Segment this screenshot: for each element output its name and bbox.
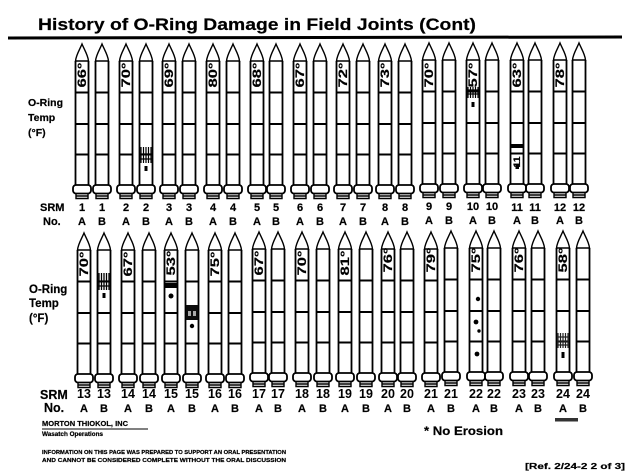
- rocket 20A: [379, 232, 397, 415]
- rocket 24B: B: [579, 403, 587, 415]
- rocket 13B with damage: [95, 233, 113, 415]
- rocket 4B: [224, 44, 242, 228]
- rocket 7B: 7: [360, 202, 366, 214]
- rocket 20A: 76°: [381, 247, 395, 272]
- rocket 7A: [334, 44, 352, 228]
- rocket 18A: A: [298, 403, 306, 415]
- rocket 18A: 18: [295, 387, 309, 401]
- rocket 21A: A: [427, 403, 435, 415]
- rocket 6B: [311, 44, 329, 228]
- rocket 11B: [526, 43, 544, 227]
- rocket 12B: 12: [573, 202, 585, 214]
- reference note: [Ref. 2/24-2 2 of 3]: [525, 462, 625, 471]
- rocket 20B: B: [403, 403, 411, 415]
- rocket 1B: B: [98, 216, 106, 228]
- rocket 13A: [75, 233, 93, 415]
- disclaimer: INFORMATION ON THIS PAGE WAS PREPARED TO SUPPORT AN ORAL PRESENTATION: [42, 450, 286, 456]
- rocket 11B: 11: [529, 202, 541, 214]
- rocket 1A: 1: [79, 202, 85, 214]
- rocket 16B: 16: [228, 387, 242, 401]
- rocket 9A: A: [425, 215, 433, 227]
- rocket 17A: 67°: [252, 250, 266, 276]
- rocket 10B: 10: [486, 201, 498, 213]
- rocket 11A with damage: 63°: [510, 62, 524, 88]
- rocket 5B: 5: [273, 202, 279, 214]
- rocket 24A with damage: [554, 231, 572, 415]
- rocket 1A: 66°: [75, 62, 89, 88]
- row 1 axis label: O-Ring temp: Temp: [28, 112, 55, 124]
- rocket 15B with damage: B: [188, 403, 196, 415]
- rocket 3B: [180, 44, 198, 228]
- rocket 18B: 18: [316, 387, 330, 401]
- rocket 5A: 5: [254, 202, 260, 214]
- rocket 3B: B: [185, 216, 193, 228]
- rocket 17A: A: [255, 403, 263, 415]
- rocket 1A: [73, 44, 91, 228]
- rocket 8A: 73°: [378, 62, 392, 88]
- rocket 14A: 14: [121, 387, 135, 401]
- row 1 axis label: O-Ring temp: (°F): [28, 127, 46, 139]
- rocket 23B: 23: [531, 387, 545, 401]
- rocket 3A: 69°: [162, 62, 176, 88]
- rocket 22B: 22: [487, 387, 501, 401]
- rocket 20A: 20: [381, 387, 395, 401]
- rocket 12A: A: [556, 215, 564, 227]
- rocket 10A with damage: [464, 43, 482, 227]
- rocket 14B: 14: [142, 387, 156, 401]
- rocket 8B: B: [401, 216, 409, 228]
- rocket 23A: A: [515, 403, 523, 415]
- rocket 23A: 23: [512, 387, 526, 401]
- rocket 3A: A: [165, 216, 173, 228]
- rocket 4B: 4: [230, 202, 237, 214]
- rocket 1B: 1: [99, 202, 105, 214]
- rocket 16A: 16: [208, 387, 222, 401]
- rocket 17A: [250, 232, 268, 415]
- rocket 15A with damage: 53°: [164, 250, 178, 276]
- rocket 19A: [336, 232, 354, 415]
- disclaimer: AND CANNOT BE CONSIDERED COMPLETE WITHOUT THE ORAL DISCUSSION: [42, 458, 286, 464]
- rocket 18A: 70°: [295, 250, 309, 276]
- rocket 22B: B: [490, 403, 498, 415]
- rocket 4B: B: [229, 216, 237, 228]
- rocket 17B: 17: [271, 387, 285, 401]
- rocket 21B: [442, 231, 460, 415]
- rocket 2A: [117, 44, 135, 228]
- rocket 7A: 72°: [336, 62, 350, 88]
- rocket 14A: A: [124, 403, 132, 415]
- rocket 11B: B: [531, 215, 539, 227]
- rocket 2B with damage: [137, 44, 155, 228]
- rocket 17A: 17: [252, 387, 266, 401]
- rocket 6B: B: [316, 216, 324, 228]
- rocket 7B: [354, 44, 372, 228]
- rocket 7A: 7: [340, 202, 346, 214]
- rocket 22A with damage: [467, 231, 485, 415]
- rocket 12A: [551, 43, 569, 227]
- rocket 5A: [248, 44, 266, 228]
- rocket 16B: [226, 233, 244, 415]
- row 1 axis label: SRM No.: No.: [43, 216, 61, 228]
- rocket 23B: B: [534, 403, 542, 415]
- rocket 20A: A: [384, 403, 392, 415]
- rocket 14A: [119, 233, 137, 415]
- rocket 2B with damage: 2: [143, 202, 149, 214]
- rocket 19A: 19: [338, 387, 352, 401]
- rocket 14B: B: [145, 403, 153, 415]
- title: History of O-Ring Damage in Field Joints (Cont): [38, 15, 476, 34]
- rocket 1B: [93, 44, 111, 228]
- rocket 16A: A: [211, 403, 219, 415]
- rocket 19B: [357, 232, 375, 415]
- row 2 axis label: SRM No.: No.: [44, 401, 64, 415]
- rocket 24A with damage: A: [559, 403, 567, 415]
- rocket 2B with damage: B: [142, 216, 150, 228]
- rocket 13B with damage: 13: [97, 387, 111, 401]
- rocket 20B: 20: [400, 387, 414, 401]
- rocket 21A: 21: [424, 387, 438, 401]
- rocket 14A: 67°: [121, 251, 135, 276]
- rocket 13A: A: [80, 403, 88, 415]
- rocket 19A: A: [341, 403, 349, 415]
- rocket 12B: B: [575, 215, 583, 227]
- rocket 6A: 6: [297, 202, 303, 214]
- rocket 11A with damage: 11: [511, 202, 523, 214]
- rocket 23A: 76°: [512, 247, 526, 272]
- row 2 axis label: O-Ring temp: (°F): [29, 313, 48, 325]
- rocket 2A: 2: [123, 202, 129, 214]
- division name: Wasatch Operations: [42, 432, 104, 438]
- row 1 axis label: SRM No.: SRM: [40, 202, 64, 214]
- rocket 18B: [314, 232, 332, 415]
- rocket 10A with damage: 10: [467, 201, 479, 213]
- rocket 11A with damage: A: [513, 215, 521, 227]
- rocket 8A: 8: [382, 202, 388, 214]
- rocket 9B: B: [445, 215, 453, 227]
- rocket 1A: A: [78, 216, 86, 228]
- rocket 16B: B: [231, 403, 239, 415]
- rocket 3A: [160, 44, 178, 228]
- row 1 axis label: O-Ring temp: O-Ring: [28, 97, 63, 109]
- rocket 21A: 79°: [424, 247, 438, 272]
- rocket 13A: 13: [77, 387, 91, 401]
- rocket 22A with damage: 75°: [469, 247, 483, 272]
- rocket 12A: 78°: [553, 62, 567, 88]
- rocket 19B: 19: [359, 387, 373, 401]
- rocket 19A: 81°: [338, 250, 352, 276]
- rocket 15B with damage: [183, 233, 201, 415]
- rocket 9B: 9: [446, 201, 452, 213]
- rocket 17B: [269, 232, 287, 415]
- company underline: [42, 428, 148, 430]
- rocket 23A: [510, 231, 528, 415]
- rocket 15A with damage: [162, 233, 180, 415]
- rocket 8B: [396, 44, 414, 228]
- rocket 3B: 3: [186, 202, 192, 214]
- rocket 16A: [206, 233, 224, 415]
- rocket 12A: 12: [554, 202, 566, 214]
- rocket 24A with damage: 58°: [556, 247, 570, 272]
- rocket 9B: [440, 43, 458, 227]
- rocket 6A: A: [296, 216, 304, 228]
- rocket 10B: B: [488, 215, 496, 227]
- legend: no erosion: * No Erosion: [424, 424, 503, 438]
- rocket 15B with damage: 15: [185, 387, 199, 401]
- rocket 2A: A: [122, 216, 130, 228]
- rocket 24B: [574, 231, 592, 415]
- rocket 4A: 80°: [206, 62, 220, 88]
- rocket 9A: 9: [426, 201, 432, 213]
- rocket 10B: [483, 43, 501, 227]
- rocket 24A with damage: 24: [556, 387, 570, 401]
- rocket 7B: B: [359, 216, 367, 228]
- row 2 axis label: O-Ring temp: O-Ring: [29, 284, 67, 296]
- rocket 4A: A: [209, 216, 217, 228]
- rocket 9A: 70°: [422, 62, 436, 88]
- rocket 11A with damage: [508, 43, 526, 227]
- rocket 7A: A: [339, 216, 347, 228]
- rocket 8B: 8: [402, 202, 408, 214]
- rocket 22A with damage: A: [472, 403, 480, 415]
- rocket 16A: 75°: [208, 251, 222, 276]
- rocket 5A: A: [253, 216, 261, 228]
- rocket 5B: [267, 44, 285, 228]
- rocket 17B: B: [274, 403, 282, 415]
- rocket 15A with damage: 15: [164, 387, 178, 401]
- rocket 18B: B: [319, 403, 327, 415]
- rocket 21A: [422, 232, 440, 415]
- rocket 4A: [204, 44, 222, 228]
- rocket 22A with damage: 22: [469, 387, 483, 401]
- company name: MORTON THIOKOL, INC: [42, 421, 128, 428]
- rocket 4A: 4: [210, 202, 217, 214]
- rocket 2A: 70°: [119, 62, 133, 88]
- rocket 15A with damage: A: [167, 403, 175, 415]
- rocket 24B: 24: [576, 387, 590, 401]
- rocket 10A with damage: A: [469, 215, 477, 227]
- row 2 axis label: O-Ring temp: Temp: [29, 298, 59, 310]
- rocket 5B: B: [272, 216, 280, 228]
- small code: [555, 418, 578, 422]
- rocket 6B: 6: [317, 202, 323, 214]
- rocket 9A: [420, 43, 438, 227]
- rocket 23B: [529, 231, 547, 415]
- rocket 21B: 21: [444, 387, 458, 401]
- rocket 3A: 3: [166, 202, 172, 214]
- rocket 8A: [376, 44, 394, 228]
- rocket 19B: B: [362, 403, 370, 415]
- rocket 8A: A: [381, 216, 389, 228]
- rocket 22B: [485, 231, 503, 415]
- rocket 13B with damage: B: [100, 403, 108, 415]
- rocket 10A with damage: 57°: [466, 62, 480, 88]
- rocket 21B: B: [447, 403, 455, 415]
- rocket 6A: 67°: [293, 62, 307, 88]
- rocket 14B: [140, 233, 158, 415]
- rocket 5A: 68°: [250, 62, 264, 88]
- rocket 11A with damage: 11: [512, 156, 522, 168]
- row 2 axis label: SRM No.: SRM: [40, 388, 68, 402]
- title rule: [8, 37, 622, 38]
- rocket 12B: [570, 43, 588, 227]
- rocket 13A: 70°: [77, 251, 91, 276]
- rocket 6A: [291, 44, 309, 228]
- rocket 20B: [398, 232, 416, 415]
- rocket 18A: [293, 232, 311, 415]
